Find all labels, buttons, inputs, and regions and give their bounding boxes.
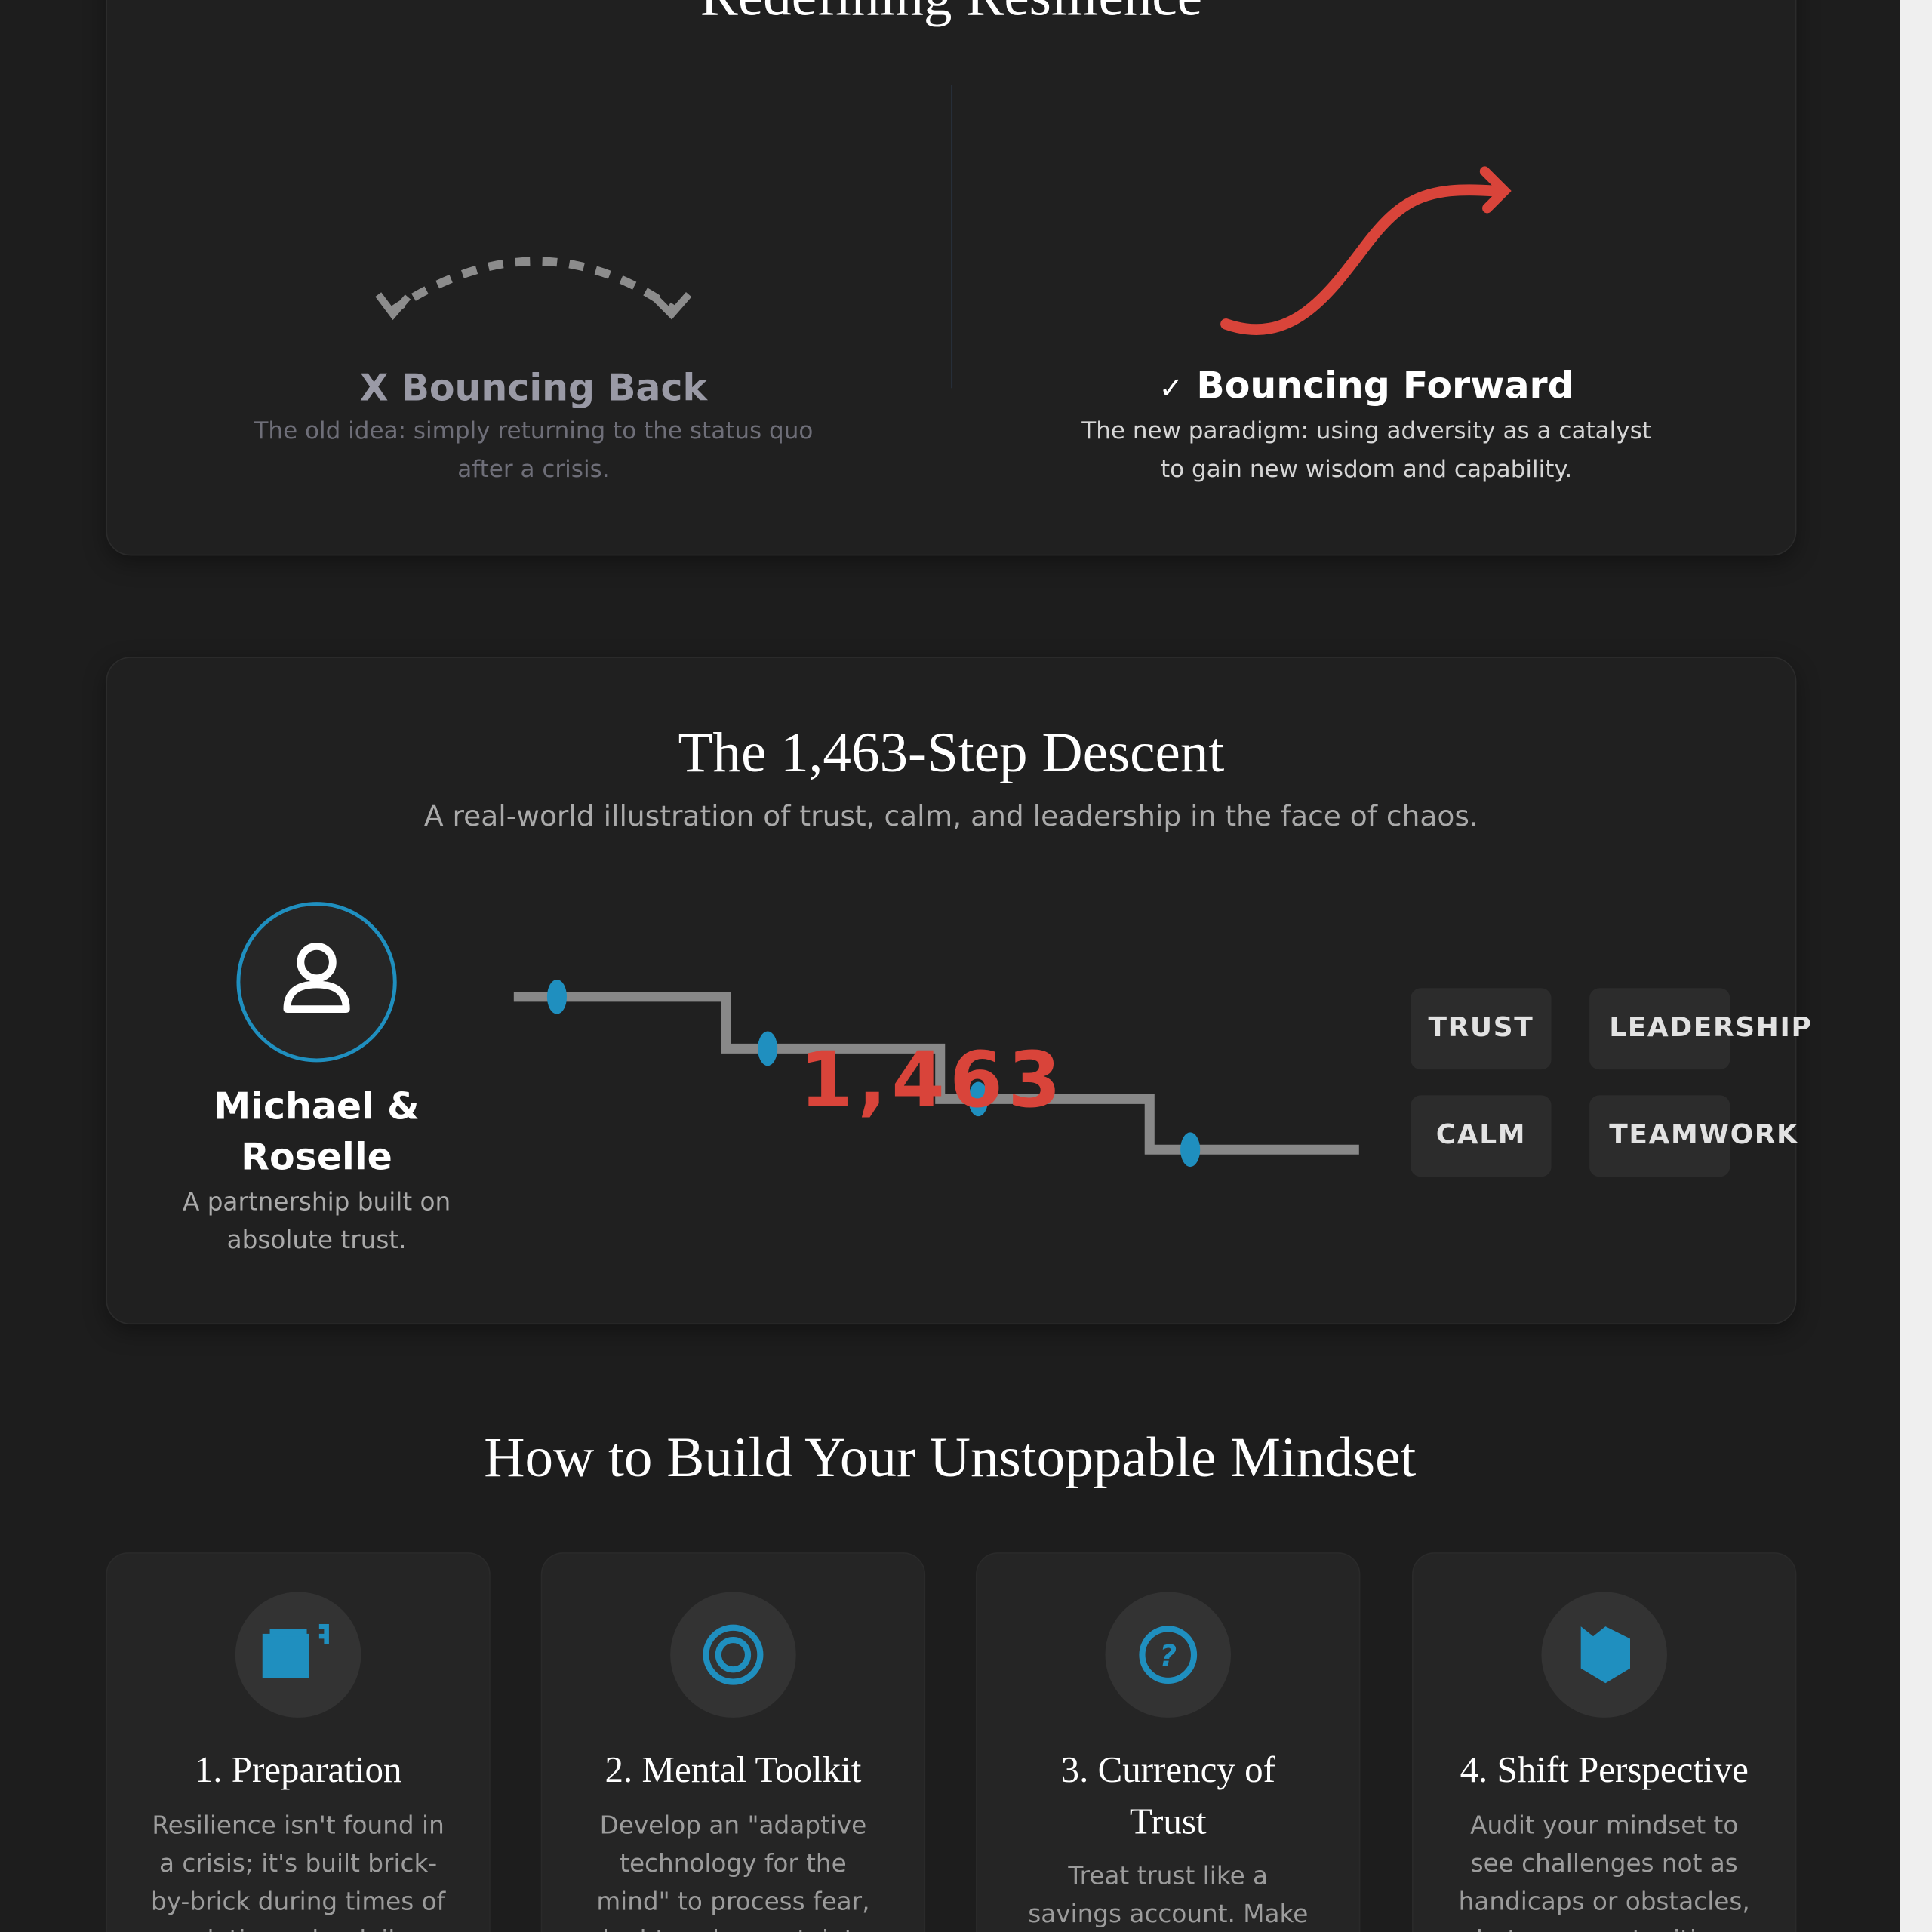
subtitle: A real-world illustration of trust, calm, and leadership in the face of chaos.	[424, 801, 1478, 833]
big number: 1,463	[799, 1035, 1066, 1125]
title: 3. Currency of Trust	[1061, 1749, 1275, 1842]
card: preparation	[106, 1552, 491, 1932]
tag: teamwork: TEAMWORK	[1609, 1120, 1799, 1151]
scrollbar strip	[1900, 0, 1932, 1932]
icon: shield	[1541, 1592, 1667, 1718]
title: 4. Shift Perspective	[1460, 1749, 1749, 1790]
tag: leadership: LEADERSHIP	[1609, 1013, 1812, 1044]
panel: 1463 step descent	[106, 657, 1796, 1324]
avatar	[236, 902, 397, 1062]
heading: bouncing back: X Bouncing Back	[360, 368, 707, 411]
icon: dashed arc bouncing back	[375, 257, 691, 320]
card: currency of trust	[976, 1552, 1360, 1932]
tag: calm: CALM	[1436, 1120, 1526, 1151]
text: bouncing back description: The old idea: simply returning to the status quo after a crisis.	[254, 417, 813, 483]
tag: trust	[1411, 988, 1552, 1069]
tag: calm	[1411, 1095, 1552, 1177]
icon: person	[284, 943, 350, 1013]
tag: leadership	[1589, 988, 1730, 1069]
card: mental toolkit	[541, 1552, 925, 1932]
title: The 1,463-Step Descent	[678, 721, 1224, 783]
divider	[951, 85, 952, 388]
name: Michael & Roselle	[214, 1085, 420, 1179]
heading: bouncing forward: ✓ Bouncing Forward	[1159, 365, 1574, 408]
icon: question coin: ?	[1159, 1639, 1177, 1673]
icon: preparation	[235, 1592, 361, 1718]
title: 2. Mental Toolkit	[605, 1749, 861, 1790]
card: shift perspective	[1412, 1552, 1796, 1932]
icon: question coin	[1105, 1592, 1231, 1718]
tag: trust: TRUST	[1428, 1013, 1534, 1044]
icon: red forward curve	[1220, 166, 1512, 335]
tags	[1411, 989, 1812, 1177]
title: 1. Preparation	[195, 1749, 401, 1790]
tag: teamwork	[1589, 1095, 1730, 1177]
icon: target	[670, 1592, 796, 1718]
chart: staircase	[513, 980, 1359, 1167]
panel: redefining resilience	[106, 0, 1796, 555]
heading: build mindset: How to Build Your Unstoppable Mindset	[484, 1426, 1416, 1488]
avatar description: A partnership built on absolute trust.	[183, 1186, 451, 1254]
text: bouncing forward description: The new paradigm: using adversity as a catalyst to gain new wisdom and capability.	[1081, 417, 1651, 483]
